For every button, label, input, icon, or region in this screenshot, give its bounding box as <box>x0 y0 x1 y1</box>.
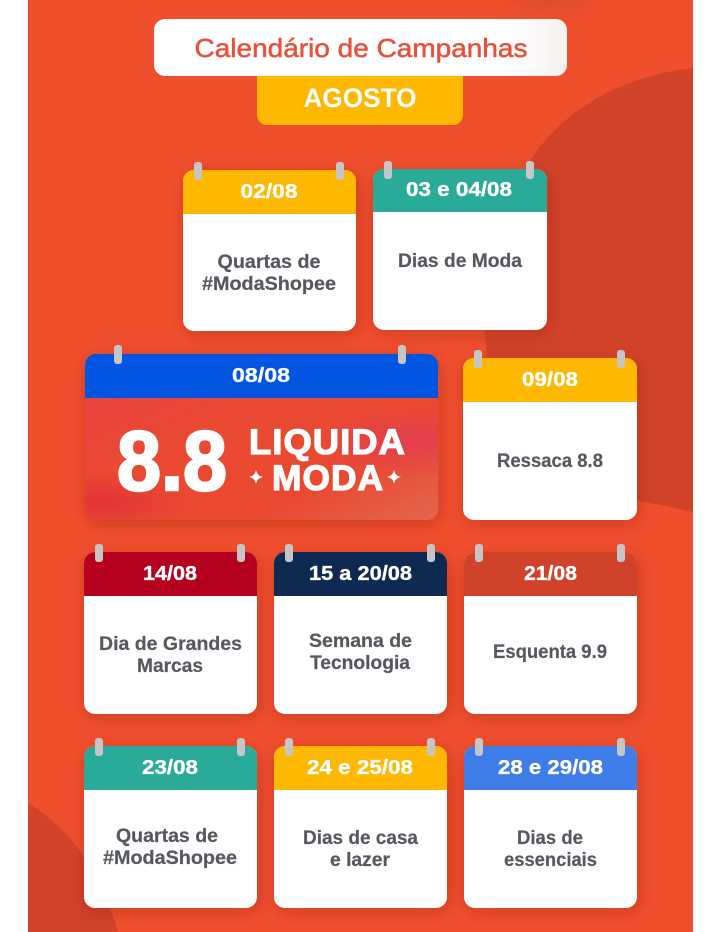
calendar card: 03 e 04/08: Dias de Moda <box>398 251 522 272</box>
month tab: AGOSTO <box>257 76 463 125</box>
calendar card: 14/08 <box>84 544 257 714</box>
title banner: Calendário de Campanhas <box>194 33 528 63</box>
calendar card: 03 e 04/08 <box>373 161 547 330</box>
calendar card: 23/08: #ModaShopee <box>103 848 237 869</box>
calendar card: 24 e 25/08: 24 e 25/08 <box>307 757 413 779</box>
calendar card: 24 e 25/08: Dias de casa <box>303 828 418 849</box>
calendar card: 15 a 20/08: Semana de <box>309 631 412 652</box>
calendar card: 09/08 <box>463 350 637 520</box>
calendar card: 14/08: Dia de Grandes <box>99 634 242 655</box>
banner artwork: 8.8 Liquida Moda: 8.8 <box>117 414 227 508</box>
calendar card: 09/08: 09/08 <box>522 369 578 391</box>
calendar card: 15 a 20/08: 15 a 20/08 <box>309 563 412 585</box>
calendar card: 14/08: 14/08 <box>143 563 197 585</box>
calendar card: 02/08 <box>183 162 356 331</box>
feature card: 08/08: 08/08 <box>232 365 290 387</box>
banner artwork: 8.8 Liquida Moda <box>85 398 438 520</box>
calendar card: 09/08: Ressaca 8.8 <box>497 451 603 472</box>
month tab: AGOSTO: AGOSTO <box>304 83 416 113</box>
calendar card: 23/08: 23/08 <box>142 757 198 779</box>
calendar card: 02/08: #ModaShopee <box>202 274 336 295</box>
calendar card: 03 e 04/08: 03 e 04/08 <box>406 179 512 201</box>
calendar card: 24 e 25/08 <box>274 738 447 908</box>
title banner <box>154 19 567 76</box>
background shape: right curve <box>485 68 693 512</box>
calendar card: 28 e 29/08: Dias de <box>517 828 583 849</box>
calendar card: 02/08: Quartas de <box>218 252 320 273</box>
calendar card: 23/08: Quartas de <box>116 826 218 847</box>
calendar card: 28 e 29/08: 28 e 29/08 <box>498 757 603 779</box>
calendar card: 28 e 29/08: essenciais <box>504 850 597 871</box>
calendar card: 14/08: Marcas <box>137 656 203 677</box>
background shape: top right shade <box>502 0 598 6</box>
calendar card: 15 a 20/08: Tecnologia <box>310 653 410 674</box>
calendar card: 21/08: Esquenta 9.9 <box>493 642 607 663</box>
calendar card: 23/08 <box>84 738 257 908</box>
calendar card: 21/08: 21/08 <box>524 563 577 585</box>
calendar card: 02/08: 02/08 <box>240 181 298 203</box>
banner artwork: 8.8 Liquida Moda: LIQUIDA <box>249 423 406 462</box>
banner artwork: 8.8 Liquida Moda: MODA <box>272 459 384 498</box>
calendar card: 21/08 <box>464 544 637 714</box>
calendar card: 24 e 25/08: e lazer <box>330 850 391 871</box>
background shape: bottom left curve <box>28 803 118 932</box>
calendar card: 15 a 20/08 <box>274 544 447 714</box>
feature card: 08/08 <box>85 345 438 520</box>
calendar card: 28 e 29/08 <box>464 738 637 908</box>
